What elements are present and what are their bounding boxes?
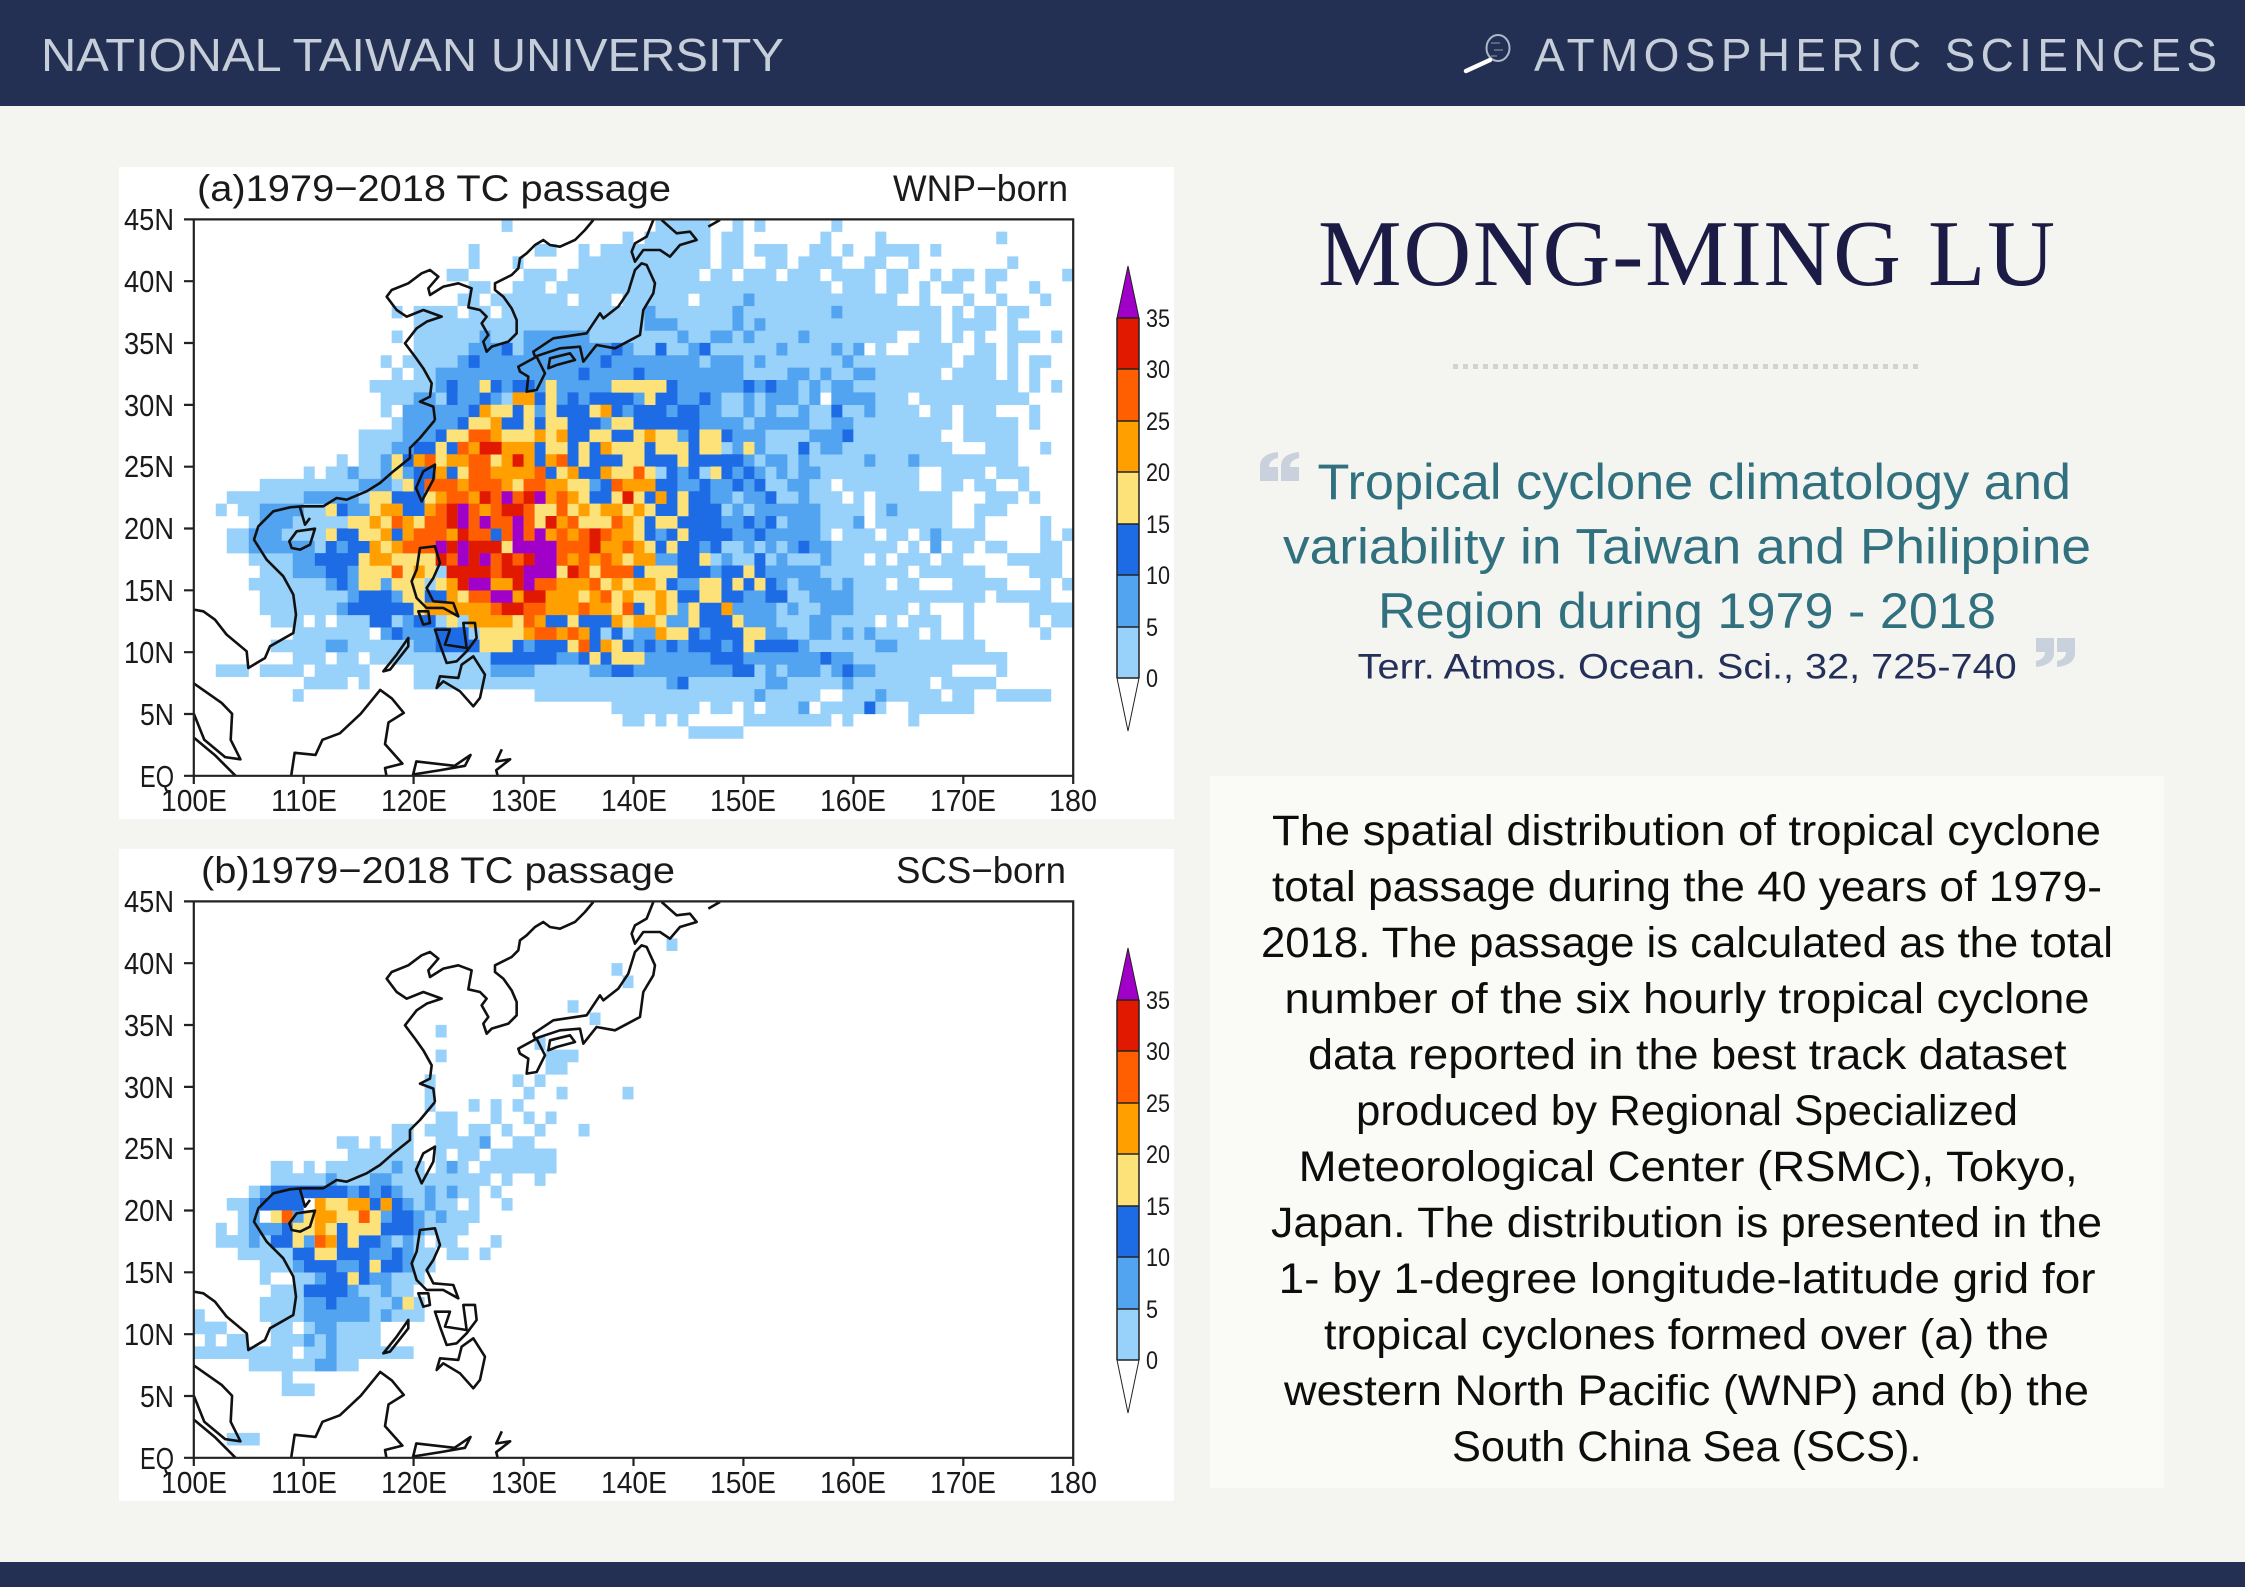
chart b: colour bar legend: 30: [1146, 1038, 1170, 1066]
chart a: region label: WNP−born: [893, 168, 1068, 209]
header bar: [0, 0, 2245, 106]
chart a: latitude labels: [124, 202, 174, 794]
chart b: plot frame and ticks: [184, 901, 1073, 1466]
chart a: latitude labels: 5N: [140, 697, 174, 732]
chart a: longitude labels: 140E: [601, 783, 667, 818]
chart a: longitude labels: 150E: [710, 783, 776, 818]
chart b: longitude labels: 160E: [820, 1465, 886, 1500]
chart a: latitude labels: 35N: [124, 326, 174, 361]
chart b: colour bar legend: 5: [1146, 1296, 1158, 1324]
panel: chart a, WNP-born TC passage: [119, 167, 1174, 819]
chart a: colour bar legend: 20: [1146, 459, 1170, 487]
chart b: longitude labels: 170E: [930, 1465, 996, 1500]
icon: opening quotation mark: [1260, 452, 1299, 481]
panel: chart b, SCS-born TC passage: [119, 849, 1174, 1501]
chart a: longitude labels: 120E: [381, 783, 447, 818]
chart b: latitude labels: 35N: [124, 1008, 174, 1043]
chart b: longitude labels: 130E: [491, 1465, 557, 1500]
chart b: colour bar legend: 0: [1146, 1347, 1158, 1375]
chart b: latitude labels: 10N: [124, 1317, 174, 1352]
footer bar: [0, 1562, 2245, 1587]
panel: description text: western North Pacific (WNP) and (b) the: [1283, 1367, 2089, 1415]
chart b: longitude labels: 180: [1049, 1465, 1097, 1500]
icon: magnifying glass: [1466, 35, 1510, 71]
panel: description text: produced by Regional Specialized: [1356, 1087, 2018, 1135]
chart a: longitude labels: 130E: [491, 783, 557, 818]
chart a: latitude labels: EQ: [140, 759, 174, 794]
chart a: latitude labels: 25N: [124, 449, 174, 484]
chart b: latitude labels: 45N: [124, 884, 174, 919]
panel: description text: Meteorological Center (RSMC), Tokyo,: [1299, 1143, 2078, 1191]
panel: description text: [1210, 776, 2164, 1488]
chart b: coastlines: [194, 902, 720, 1458]
chart b: colour bar legend: [1117, 948, 1170, 1413]
quote block: [1260, 452, 2091, 686]
chart b: colour bar legend: 25: [1146, 1090, 1170, 1118]
chart b: colour bar legend: 15: [1146, 1193, 1170, 1221]
chart a: colour bar legend: 0: [1146, 665, 1158, 693]
chart b: latitude labels: 40N: [124, 946, 174, 981]
chart b: colour bar legend: 10: [1146, 1244, 1170, 1272]
panel: description text: 2018. The passage is calculated as the total: [1261, 919, 2113, 967]
chart a: longitude labels: [161, 783, 1097, 818]
chart b: longitude labels: [161, 1465, 1097, 1500]
chart b: longitude labels: 100E: [161, 1465, 227, 1500]
chart b: latitude labels: 20N: [124, 1193, 174, 1228]
panel: description text: total passage during the 40 years of 1979-: [1272, 863, 2102, 911]
chart b: heat map grid: [194, 945, 677, 1439]
chart a: latitude labels: 40N: [124, 264, 174, 299]
panel: description text: Japan. The distribution is presented in the: [1271, 1199, 2102, 1247]
panel: description text: data reported in the best track dataset: [1308, 1031, 2067, 1079]
chart a: coastlines: [194, 220, 720, 776]
chart b: longitude labels: 150E: [710, 1465, 776, 1500]
chart a: longitude labels: 110E: [271, 783, 337, 818]
title: author name: MONG-MING LU: [1318, 202, 2055, 306]
panel: description text: number of the six hourly tropical cyclone: [1284, 975, 2090, 1023]
panel: description text: tropical cyclones formed over (a) the: [1324, 1311, 2049, 1359]
chart a: latitude labels: 30N: [124, 388, 174, 423]
chart a: latitude labels: 10N: [124, 635, 174, 670]
quote: paper title: Tropical cyclone climatology and: [1318, 454, 2071, 510]
chart a: longitude labels: 160E: [820, 783, 886, 818]
chart a: plot frame and ticks: [184, 219, 1073, 784]
chart b: latitude labels: 15N: [124, 1255, 174, 1290]
chart a: colour bar legend: 30: [1146, 356, 1170, 384]
header: university name: NATIONAL TAIWAN UNIVERSITY: [41, 29, 784, 81]
chart a: latitude labels: 45N: [124, 202, 174, 237]
chart a: heat map grid: [216, 226, 1073, 733]
chart a: latitude labels: 15N: [124, 573, 174, 608]
header: department name: ATMOSPHERIC SCIENCES: [1534, 29, 2217, 81]
icon: closing quotation mark: [2036, 638, 2075, 667]
quote: paper title: variability in Taiwan and Philippine: [1283, 518, 2091, 574]
chart a: longitude labels: 170E: [930, 783, 996, 818]
panel: description text: South China Sea (SCS).: [1452, 1423, 1922, 1471]
chart b: longitude labels: 110E: [271, 1465, 337, 1500]
chart b: latitude labels: 5N: [140, 1379, 174, 1414]
quote: paper title: Region during 1979 - 2018: [1378, 583, 1996, 639]
chart b: longitude labels: 120E: [381, 1465, 447, 1500]
chart a: colour bar legend: [1117, 266, 1170, 731]
chart b: latitude labels: [124, 884, 174, 1476]
chart b: region label: SCS−born: [896, 850, 1066, 891]
citation: Terr. Atmos. Ocean. Sci., 32, 725-740: [1358, 647, 2017, 686]
chart b: colour bar legend: 35: [1146, 987, 1170, 1015]
chart a: colour bar legend: 10: [1146, 562, 1170, 590]
quote: paper title: [1283, 454, 2091, 639]
chart a: colour bar legend: 35: [1146, 305, 1170, 333]
chart b: latitude labels: 25N: [124, 1131, 174, 1166]
chart a: colour bar legend: 5: [1146, 614, 1158, 642]
chart b: colour bar legend: 20: [1146, 1141, 1170, 1169]
chart b: latitude labels: EQ: [140, 1441, 174, 1476]
chart a: title: (a)1979−2018 TC passage: [197, 168, 671, 209]
chart a: colour bar legend: 15: [1146, 511, 1170, 539]
chart b: title: (b)1979−2018 TC passage: [201, 850, 675, 891]
chart a: latitude labels: 20N: [124, 511, 174, 546]
chart a: longitude labels: 180: [1049, 783, 1097, 818]
chart a: longitude labels: 100E: [161, 783, 227, 818]
chart b: latitude labels: 30N: [124, 1070, 174, 1105]
chart b: longitude labels: 140E: [601, 1465, 667, 1500]
chart a: colour bar legend: 25: [1146, 408, 1170, 436]
panel: description text: 1- by 1-degree longitude-latitude grid for: [1279, 1255, 2096, 1303]
panel: description text: The spatial distribution of tropical cyclone: [1272, 807, 2101, 855]
